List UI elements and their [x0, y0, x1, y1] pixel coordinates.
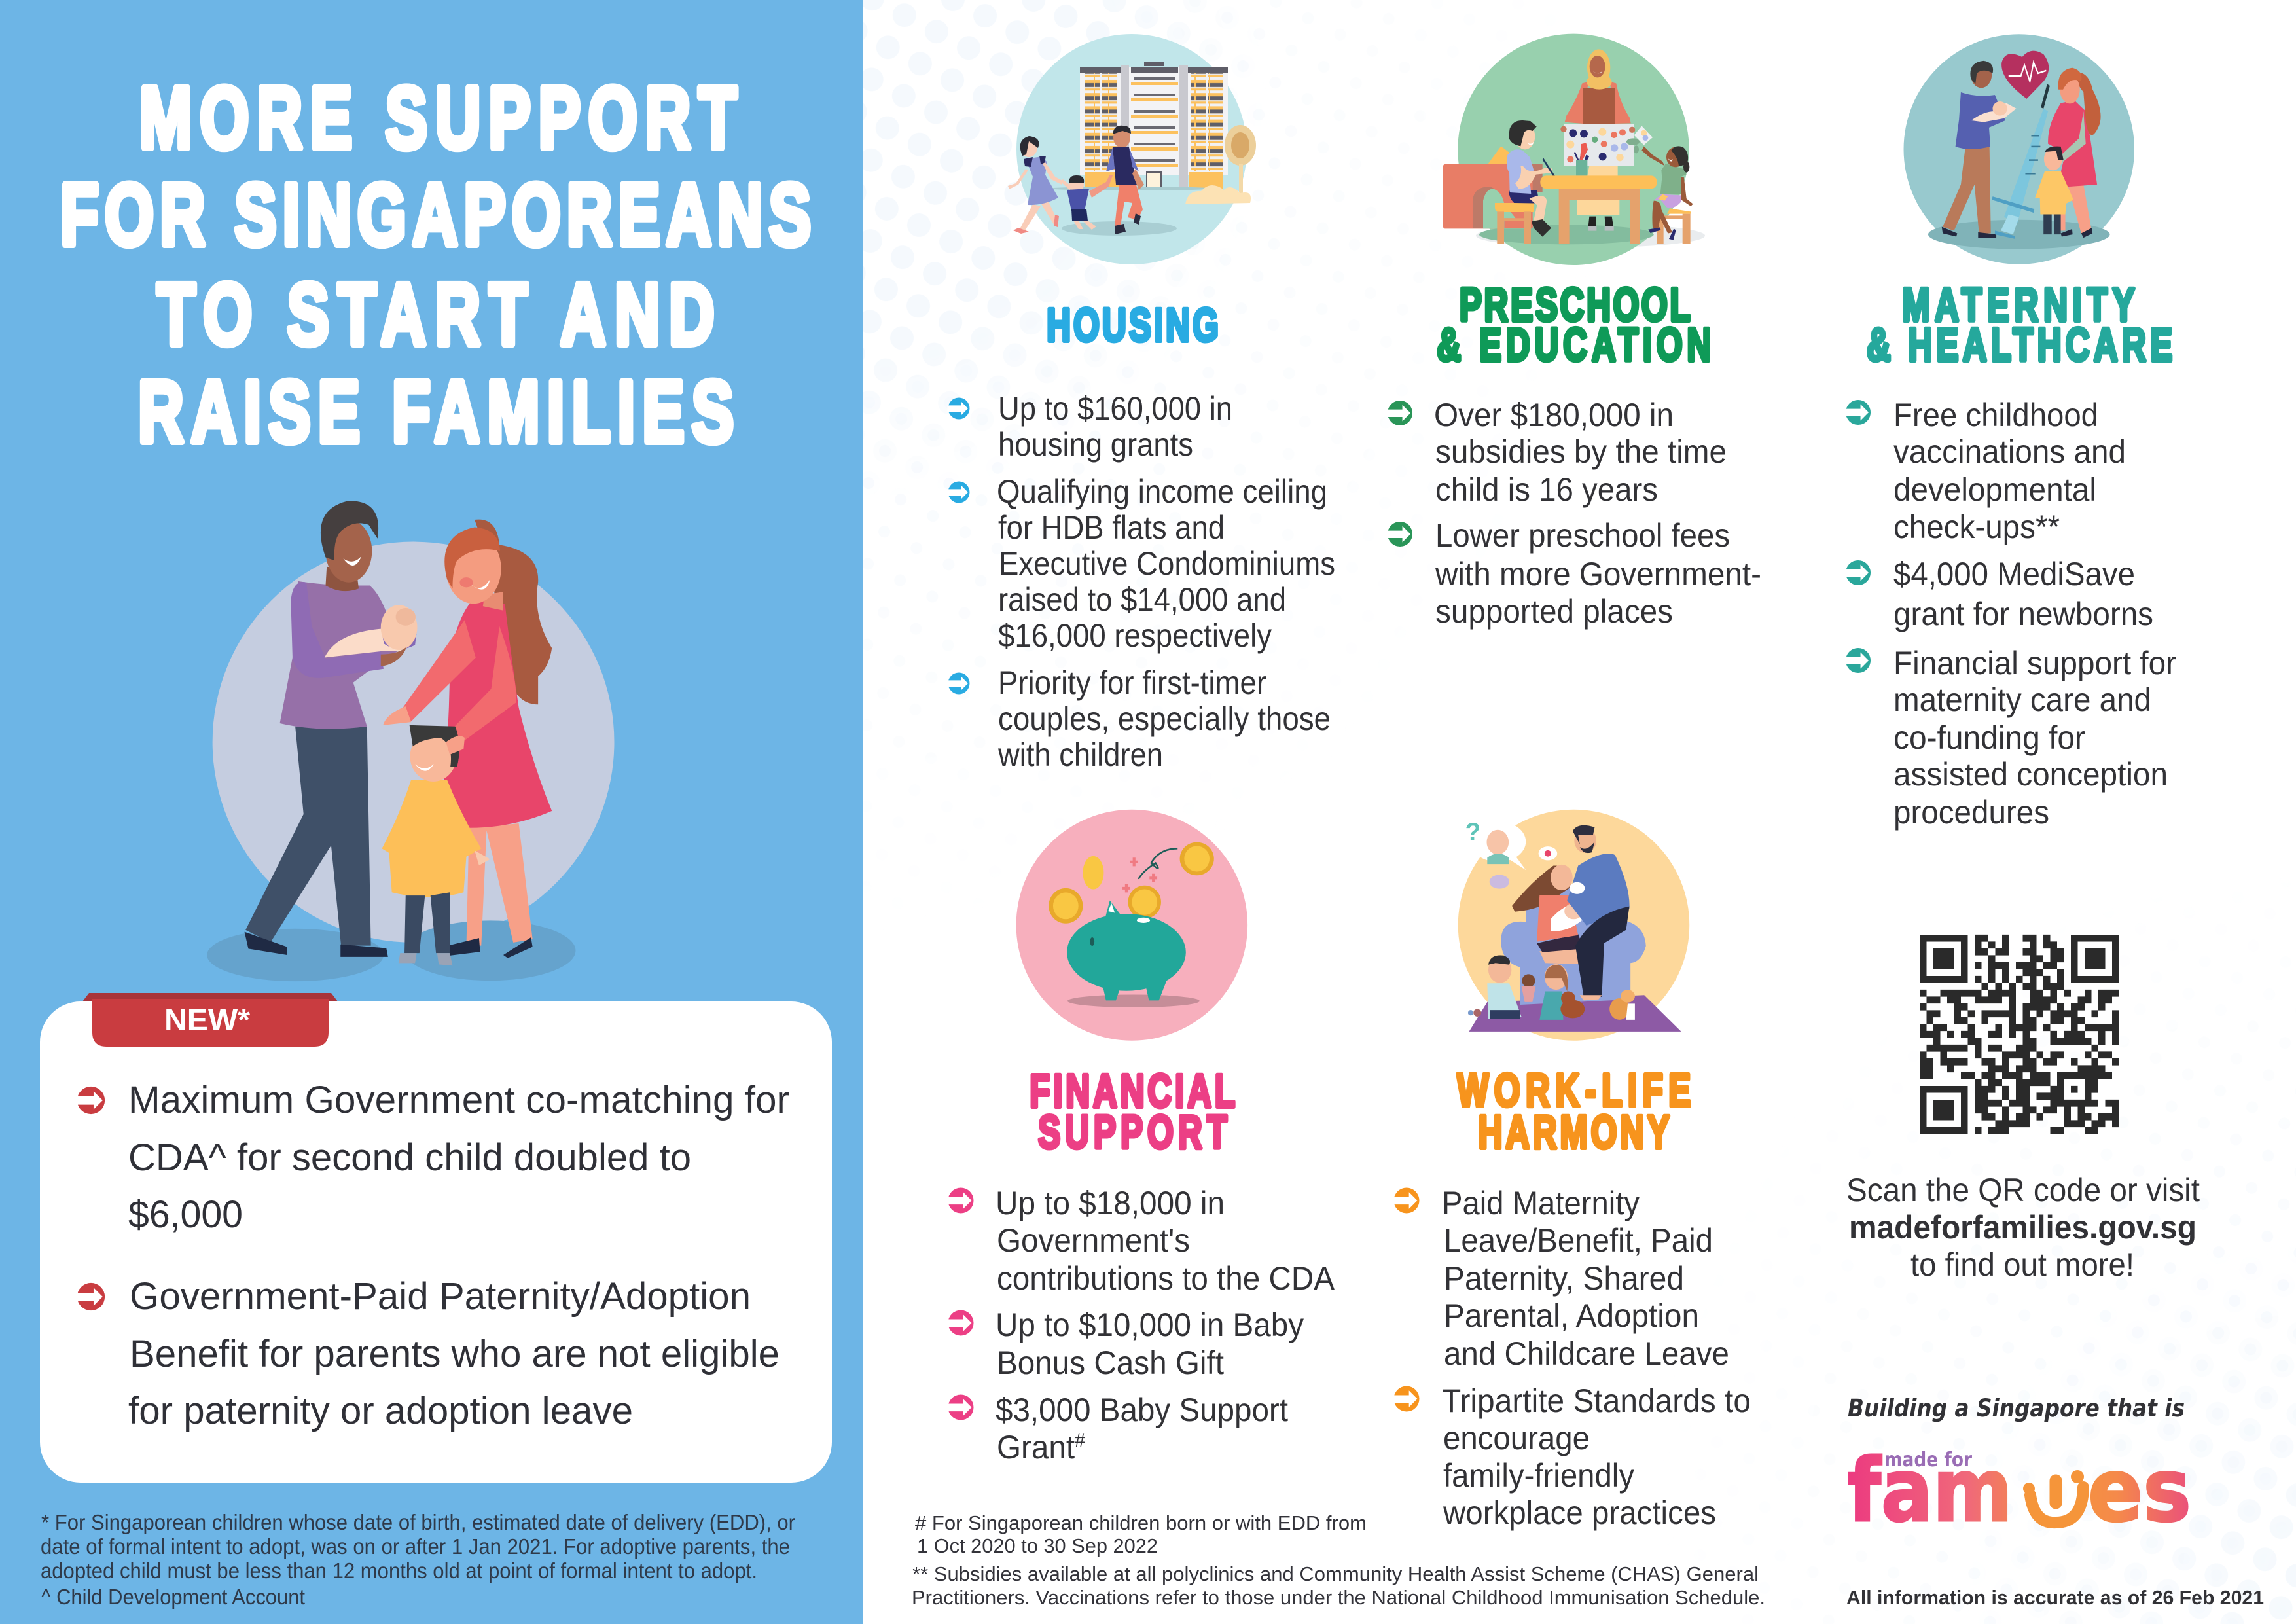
footnote: right panel	[912, 1511, 1765, 1609]
footnote: left panel: date of formal intent to adopt, was on or after 1 Jan 2021. For adoptive parents, the	[41, 1534, 790, 1559]
bullet: vaccinations: vaccinations and	[1893, 433, 2126, 470]
bullet: housing grants: Up to $160,000 in	[998, 390, 1232, 427]
illustration: piggy bank	[1016, 810, 1247, 1041]
footnote: left panel: adopted child must be less than 12 months old at point of formal intent to adopt.	[41, 1559, 757, 1583]
bullet: maternity care support: procedures	[1893, 794, 2049, 831]
illustration: preschool	[1443, 34, 1705, 265]
bullet: maternity care support: Financial support for	[1893, 645, 2176, 681]
panel: new measures card	[40, 993, 832, 1483]
bullet: housing grants: housing grants	[998, 426, 1193, 463]
bullet: maternity care support	[1845, 645, 2176, 831]
footnote: right panel: ** Subsidies available at all polyclinics and Community Health Assist Scheme (CHAS) General	[912, 1562, 1759, 1585]
heading: financial support: SUPPORT	[1038, 1107, 1227, 1159]
footnote: right panel: 1 Oct 2020 to 30 Sep 2022	[917, 1534, 1158, 1557]
heading: work-life harmony: WORK-LIFE	[1457, 1065, 1691, 1117]
heading: financial support: FINANCIAL	[1030, 1066, 1235, 1117]
panel: work-life harmony	[1393, 810, 1751, 1531]
bullet: first-timer priority: with children	[997, 736, 1163, 773]
bullet: tripartite standards	[1393, 1382, 1751, 1531]
bullet: medisave grant: $4,000 MediSave	[1893, 556, 2135, 592]
panel: financial support	[947, 810, 1335, 1466]
text: scan prompt: Scan the QR code or visit	[1846, 1172, 2200, 1208]
bullet: cda contributions: Government's	[997, 1222, 1190, 1259]
bullet: tripartite standards: encourage	[1443, 1420, 1590, 1456]
bullet: first-timer priority: Priority for first-timer	[998, 664, 1266, 701]
logo: made for families: made for	[1884, 1449, 1972, 1471]
illustration: maternity	[1904, 34, 2134, 264]
bullet: paid leave: Paternity, Shared	[1444, 1260, 1684, 1297]
bullet: medisave grant	[1845, 556, 2153, 632]
bullet: maternity care support: co-funding for	[1893, 719, 2085, 756]
footnote: left panel	[41, 1510, 795, 1609]
panel: call to action	[1846, 935, 2264, 1609]
bullet: paid leave: Parental, Adoption	[1444, 1297, 1699, 1334]
footnote: left panel: ^ Child Development Account	[41, 1585, 305, 1609]
illustration: family on sofa: ?	[1465, 818, 1480, 846]
bullet: vaccinations: Free childhood	[1893, 397, 2098, 433]
bullet: baby support grant	[947, 1392, 1288, 1466]
logo: made for families	[1848, 1441, 2191, 1542]
title: MORE SUPPORT	[139, 68, 737, 167]
bullet: subsidies: child is 16 years	[1435, 471, 1658, 508]
bullet: baby bonus	[947, 1307, 1304, 1381]
bullet: paternity benefit: for paternity or adoption leave	[128, 1390, 633, 1432]
heading: housing: HOUSING	[1047, 300, 1219, 352]
heading: preschool and education: PRESCHOOL	[1460, 280, 1691, 331]
bullet: tripartite standards: workplace practices	[1443, 1494, 1716, 1531]
bullet: subsidies	[1387, 397, 1727, 508]
title: RAISE FAMILIES	[138, 362, 734, 461]
bullet: co-matching: $6,000	[128, 1193, 243, 1236]
bullet: income ceiling: for HDB flats and	[998, 509, 1225, 546]
panel: housing	[947, 34, 1335, 773]
bullet: cda contributions: Up to $18,000 in	[996, 1185, 1225, 1221]
illustration: housing	[1008, 34, 1256, 264]
bullet: cda contributions: contributions to the CDA	[997, 1260, 1335, 1297]
bullet: paid leave: Leave/Benefit, Paid	[1444, 1222, 1713, 1259]
heading: financial support	[1030, 1066, 1235, 1159]
text: accuracy date: All information is accurate as of 26 Feb 2021	[1846, 1586, 2264, 1609]
background: white page with dots	[863, 0, 2296, 1624]
bullet: paid leave: and Childcare Leave	[1444, 1335, 1729, 1372]
bullet: co-matching	[77, 1079, 789, 1236]
bullet: vaccinations: developmental	[1893, 471, 2096, 508]
heading: work-life harmony	[1457, 1065, 1691, 1159]
bullet: cda contributions	[947, 1185, 1335, 1297]
bullet: maternity care support: maternity care and	[1893, 681, 2151, 718]
bullet: lower fees	[1387, 517, 1761, 630]
heading: preschool and education: & EDUCATION	[1437, 319, 1711, 371]
text: scan prompt	[1846, 1172, 2200, 1283]
bullet: first-timer priority: couples, especially those	[998, 700, 1331, 737]
logo: made for families: fam	[1848, 1441, 2013, 1542]
bullet: baby support grant: $3,000 Baby Support	[996, 1392, 1288, 1428]
qr code	[1920, 935, 2119, 1134]
footnote: left panel: * For Singaporean children whose date of birth, estimated date of delivery (EDD), or	[41, 1510, 795, 1534]
bullet: subsidies: subsidies by the time	[1435, 433, 1727, 470]
text: scan prompt: to find out more!	[1910, 1246, 2134, 1283]
bullet: baby support grant: Grant	[997, 1429, 1079, 1466]
panel: left blue panel	[0, 0, 863, 1624]
bullet: first-timer priority	[947, 664, 1331, 773]
heading: preschool and education	[1437, 280, 1711, 371]
bullet: lower fees: supported places	[1435, 593, 1673, 630]
panel: maternity and healthcare	[1845, 34, 2176, 831]
bullet: lower fees: with more Government-	[1435, 556, 1761, 592]
bullet: paid leave: Paid Maternity	[1442, 1185, 1640, 1221]
bullet: income ceiling: Executive Condominiums	[999, 545, 1335, 582]
text: building a singapore tagline: Building a Singapore that is	[1848, 1394, 2185, 1422]
bullet: paid leave	[1393, 1185, 1729, 1372]
title	[60, 68, 811, 461]
bullet: vaccinations: check-ups**	[1893, 509, 2060, 545]
bullet: maternity care support: assisted conception	[1893, 756, 2168, 793]
bullet: lower fees: Lower preschool fees	[1435, 517, 1730, 554]
panel: preschool and education	[1387, 34, 1761, 630]
bullet: income ceiling: Qualifying income ceiling	[997, 473, 1327, 510]
bullet: paternity benefit: Government-Paid Paternity/Adoption	[130, 1275, 751, 1318]
bullet: subsidies: Over $180,000 in	[1434, 397, 1674, 433]
new tag	[82, 993, 338, 1047]
heading: maternity and healthcare	[1867, 280, 2172, 371]
bullet: income ceiling: $16,000 respectively	[998, 617, 1272, 654]
new tag: NEW*	[164, 1002, 251, 1037]
bullet: paternity benefit	[77, 1275, 780, 1432]
illustration: family on sofa	[1458, 810, 1689, 1041]
bullet: co-matching: Maximum Government co-matching for	[128, 1079, 789, 1121]
heading: maternity and healthcare: & HEALTHCARE	[1867, 319, 2172, 371]
bullet: income ceiling	[947, 473, 1335, 654]
footnote: right panel: # For Singaporean children born or with EDD from	[915, 1511, 1367, 1534]
bullet: baby bonus: Up to $10,000 in Baby	[996, 1307, 1304, 1343]
illustration: family with baby	[207, 501, 614, 981]
heading: work-life harmony: HARMONY	[1479, 1107, 1670, 1159]
bullet: baby bonus: Bonus Cash Gift	[997, 1344, 1224, 1381]
heading: maternity and healthcare: MATERNITY	[1902, 280, 2135, 331]
bullet: tripartite standards: family-friendly	[1443, 1457, 1634, 1494]
bullet: medisave grant: grant for newborns	[1893, 596, 2153, 632]
title: TO START AND	[157, 264, 715, 363]
bullet: baby support grant: #	[1075, 1430, 1085, 1451]
bullet: co-matching: CDA^ for second child doubled to	[128, 1136, 691, 1179]
text: scan prompt: madeforfamilies.gov.sg	[1849, 1209, 2197, 1246]
bullet: housing grants	[947, 390, 1232, 463]
logo: made for families: es	[2088, 1441, 2191, 1542]
bullet: paternity benefit: Benefit for parents who are not eligible	[130, 1333, 780, 1375]
title: FOR SINGAPOREANS	[60, 165, 811, 264]
bullet: vaccinations	[1845, 397, 2126, 545]
bullet: tripartite standards: Tripartite Standards to	[1442, 1382, 1751, 1419]
footnote: right panel: Practitioners. Vaccinations refer to those under the National Childhood Immunisation Schedule.	[912, 1586, 1765, 1609]
bullet: income ceiling: raised to $14,000 and	[998, 581, 1286, 618]
